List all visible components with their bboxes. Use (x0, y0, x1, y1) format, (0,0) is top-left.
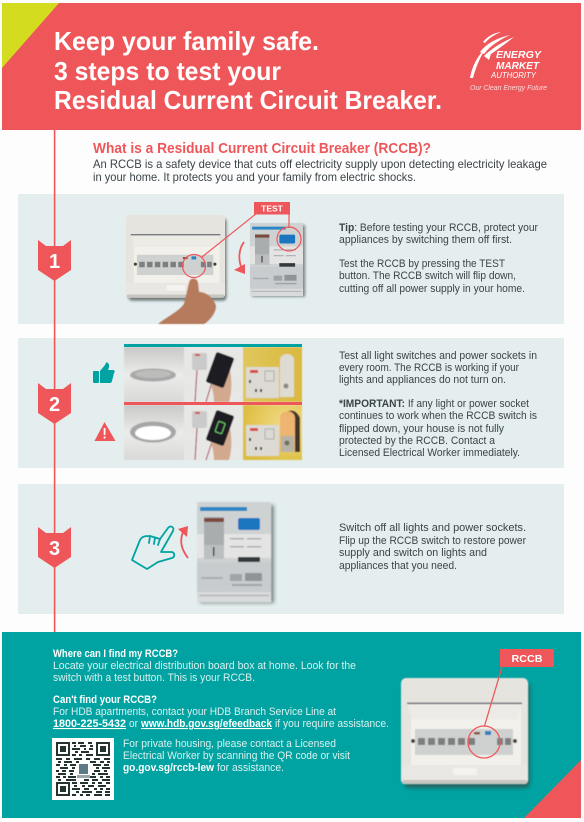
step 3 text (339, 522, 526, 572)
logo: Energy Market Authority (470, 32, 547, 92)
pressing hand (158, 278, 216, 324)
TEST label (254, 202, 290, 214)
panel: step 2 background (18, 338, 564, 468)
step 2 text: protected by the RCCB. Contact a (339, 435, 495, 447)
where can I find: Where can I find my RCCB? (53, 648, 178, 660)
title (54, 26, 442, 115)
private housing text: Electrical Worker by scanning the QR code or visit (123, 750, 350, 762)
step 3 text: supply and switch on lights and (339, 547, 487, 559)
icon: pointing hand outline (132, 527, 174, 569)
header banner (2, 3, 581, 130)
step 2 text: Licensed Electrical Worker immediately. (339, 447, 520, 459)
step 3 text: Flip up the RCCB switch to restore power (339, 535, 526, 547)
can't find: 1800-225-5432 (53, 718, 126, 730)
distribution box with RCCB callout (401, 649, 554, 788)
step 3 illustration (132, 502, 274, 603)
step 3 text: Switch off all lights and power sockets. (339, 522, 526, 534)
title: Residual Current Circuit Breaker. (54, 85, 442, 115)
can't find: Can't find your RCCB? (53, 694, 157, 706)
step 2 photo grid (124, 344, 302, 460)
step 2 text: Test all light switches and power sockets in (339, 350, 537, 362)
can't find: For HDB apartments, contact your HDB Branch Service Line at (53, 706, 336, 718)
intro text (93, 157, 547, 184)
step 2 text: *IMPORTANT: If any light or power socket (339, 398, 529, 410)
RCCB label: RCCB (512, 653, 543, 665)
can't find (53, 694, 389, 730)
top row photos: off (124, 347, 302, 402)
step 1 text: cutting off all power supply in your home. (339, 283, 525, 295)
yellow corner (2, 3, 59, 68)
logo: Energy Market Authority: MARKET (496, 60, 541, 72)
can't find: www.hdb.gov.sg/efeedback (140, 718, 273, 730)
intro text: An RCCB is a safety device that cuts off electricity supply upon detecting electricity leakage (93, 157, 547, 171)
private housing text: For private housing, please contact a Licensed (123, 738, 336, 750)
RCCB label (500, 649, 554, 667)
private housing text: go.gov.sg/rccb-lew (123, 762, 215, 774)
distribution box (126, 215, 227, 301)
where can I find: switch with a test button. This is your RCCB. (53, 672, 255, 684)
panel: step 1 background (18, 194, 564, 324)
can't find: if you require assistance. (275, 718, 389, 730)
step 1 text: button. The RCCB switch will flip down, (339, 270, 516, 282)
where can I find: Locate your electrical distribution board box at home. Look for the (53, 660, 356, 672)
logo: Energy Market Authority: Our Clean Energy Future (470, 85, 547, 92)
logo: Energy Market Authority: ENERGY (496, 49, 542, 61)
red status bar (124, 402, 302, 405)
QR code (52, 738, 114, 800)
step 2 text: every room. The RCCB is working if your (339, 362, 519, 374)
private housing text: for assistance. (217, 762, 284, 774)
step 1 text: Test the RCCB by pressing the TEST (339, 258, 505, 270)
step 1 badge (38, 240, 71, 281)
private housing text (123, 738, 350, 774)
panel: step 3 background (18, 484, 564, 614)
step 1 illustration (126, 202, 305, 324)
step 1 text (339, 222, 538, 295)
rccb device (250, 223, 305, 297)
step 3 badge: 3 (49, 538, 60, 560)
title: 3 steps to test your (54, 56, 281, 86)
step 2 badge: 2 (49, 394, 60, 416)
logo: Energy Market Authority: AUTHORITY (490, 70, 537, 80)
TEST label: TEST (261, 204, 284, 214)
step 1 text: Tip: Before testing your RCCB, protect your (339, 222, 538, 234)
step 2 text: lights and appliances do not turn on. (339, 374, 506, 386)
intro heading: What is a Residual Current Circuit Breaker (RCCB)? (93, 141, 431, 157)
timeline line (54, 130, 55, 635)
title: Keep your family safe. (54, 26, 319, 56)
icon: thumbs up (93, 362, 115, 383)
callout lines (182, 213, 301, 278)
bottom row photos: on (124, 405, 302, 460)
step 3 badge (38, 527, 71, 568)
curved arrow up (178, 526, 188, 558)
step 3 text: appliances that you need. (339, 560, 457, 572)
step 1 badge: 1 (49, 251, 60, 273)
step 2 badge (38, 383, 71, 424)
where can I find (53, 648, 356, 684)
icon: warning triangle (94, 422, 116, 441)
curved arrow down (234, 242, 245, 274)
step 2 text: continues to work when the RCCB switch is (339, 410, 538, 422)
footer panel (2, 632, 581, 818)
step 2 text: flipped down, your house is not fully (339, 423, 505, 435)
step 1 text: appliances by switching them off first. (339, 234, 512, 246)
can't find: or (129, 718, 138, 730)
intro text: in your home. It protects you and your family from electric shocks. (93, 170, 416, 184)
red corner (524, 760, 581, 818)
rccb device (197, 502, 274, 603)
teal status bar (124, 344, 302, 347)
step 2 text (339, 350, 538, 459)
